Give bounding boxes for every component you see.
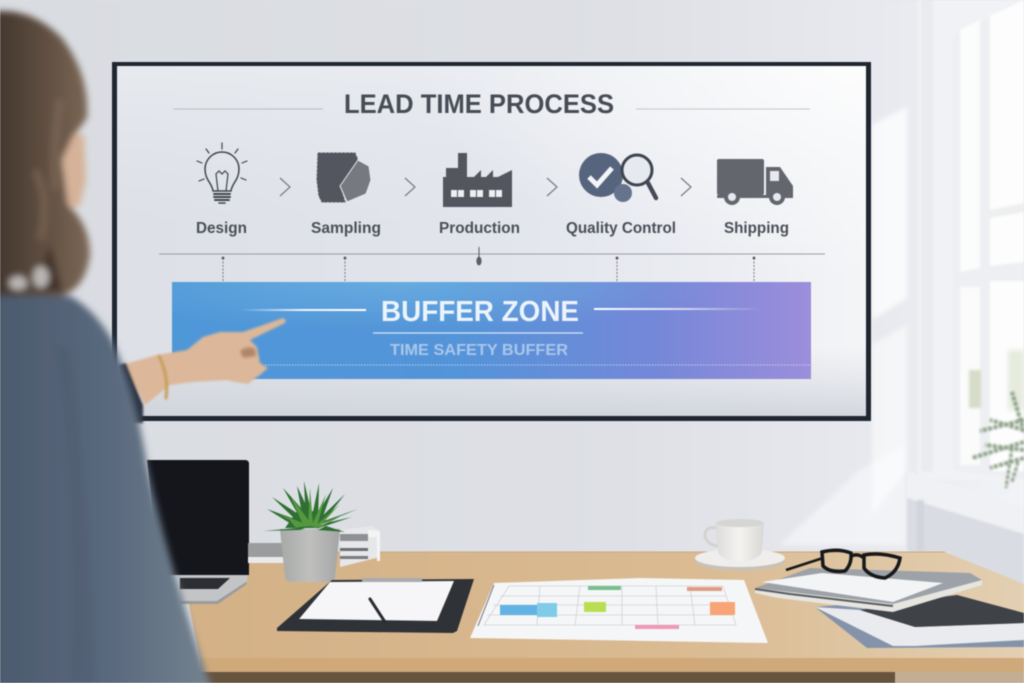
- timeline with connectors: [159, 247, 825, 281]
- process arrows: [280, 178, 691, 196]
- buffer zone heading with rules: BUFFER ZONE: [381, 296, 579, 328]
- process step labels: Design: [196, 220, 247, 237]
- process step labels: [196, 220, 789, 237]
- panel: buffer zone: [172, 282, 811, 379]
- desk: [188, 552, 1024, 683]
- buffer zone subtitle: TIME SAFETY BUFFER: [390, 342, 568, 359]
- window with frame and trim: [918, 0, 1024, 480]
- heading: lead time process: LEAD TIME PROCESS: [344, 89, 614, 119]
- eyeglasses: [786, 550, 900, 578]
- coffee cup and saucer: [695, 519, 785, 571]
- potted plant: [263, 481, 358, 582]
- pointing arm and hand: [118, 318, 286, 423]
- window plant: [972, 392, 1024, 488]
- process step labels: Sampling: [311, 220, 381, 237]
- icon: production factory: [443, 153, 512, 207]
- sunlight patches on wall: [780, 107, 907, 545]
- icon: shipping truck: [717, 159, 793, 205]
- icon: quality control check and magnifier: [579, 153, 656, 202]
- wall display frame: [112, 62, 871, 421]
- icon: design light bulb: [197, 143, 247, 203]
- person from behind: [0, 11, 212, 683]
- process step labels: Quality Control: [566, 220, 676, 237]
- process step labels: Production: [439, 220, 520, 237]
- books behind plant: [248, 526, 380, 567]
- icon: sampling swatches: [317, 153, 371, 202]
- clipboard with paper and pen: [277, 578, 474, 633]
- notebook with glasses: [755, 568, 982, 612]
- project calendar sheet: [470, 578, 768, 643]
- process step labels: Shipping: [724, 220, 789, 237]
- lower folders: [815, 595, 1024, 648]
- window sill: [907, 471, 1024, 590]
- laptop: [147, 460, 249, 604]
